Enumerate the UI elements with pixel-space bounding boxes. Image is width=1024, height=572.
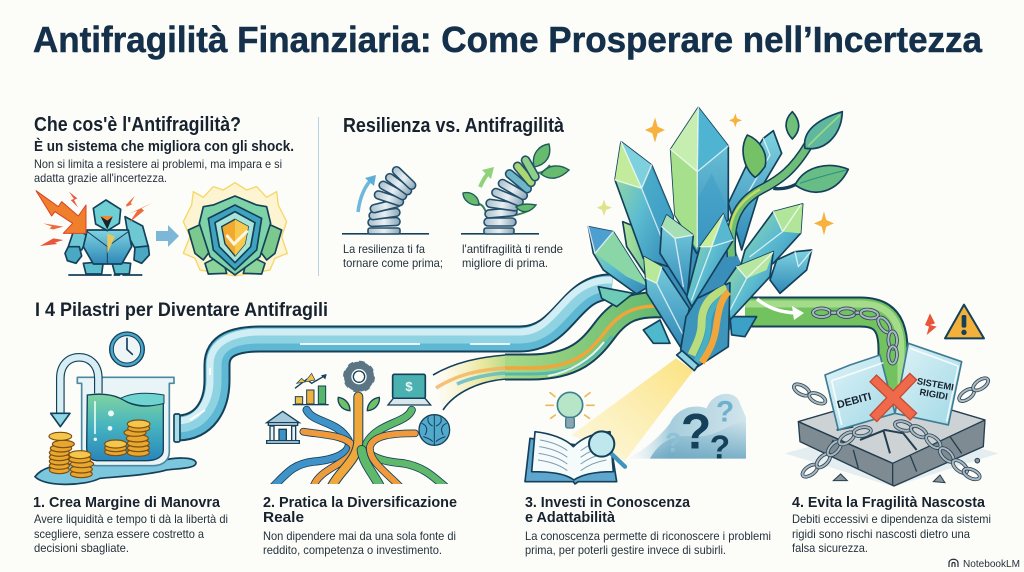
pillar 3 text: La conoscenza permette di riconoscere i problemi [525, 529, 771, 543]
cracked stone base [785, 393, 998, 487]
text block: antifragility: migliore di prima. [462, 256, 548, 270]
watermark: NotebookLM: NotebookLM [963, 558, 1020, 570]
heading: resilience vs antifragility: Resilienza vs. Antifragilità [343, 115, 565, 137]
pillar 3 heading: e Adattabilità [525, 509, 616, 526]
crystal: left short [588, 227, 648, 294]
flashlight beam [572, 358, 693, 461]
crystal: right upper [737, 204, 803, 280]
illustration: roots with income icons [267, 363, 450, 487]
pipe: multicolour knowledge stream [433, 305, 665, 410]
illustration: book, bulb and question fog [525, 358, 746, 484]
pillar 1 [33, 494, 228, 555]
question marks: ? [681, 403, 711, 459]
crystal: tall centre [671, 107, 728, 253]
vine with leaves [730, 112, 848, 257]
illustration: fragile blocks and chains [785, 305, 998, 487]
pillar 2 heading: 2. Pratica la Diversificazione [263, 494, 457, 511]
flashlight nozzle [677, 351, 698, 371]
pillar 2 text: Non dipendere mai da una sola fonte di [263, 529, 456, 543]
pillar 2 heading [263, 494, 457, 526]
pillar 4 text: Debiti eccessivi e dipendenza da sistemi [792, 512, 991, 526]
beaker [77, 377, 174, 466]
pillar 2 heading: Reale [263, 509, 304, 526]
icon: laptop with dollar: $ [405, 379, 413, 394]
crystal: lower fragments [598, 287, 757, 343]
question fog [628, 394, 746, 459]
icon: spring with leaves and green arrow [461, 144, 569, 235]
icon: blue transition arrow [156, 225, 179, 247]
pillar 4 text: rigidi sono rischi nascosti dietro una [792, 527, 970, 541]
icon: white flow arrow [757, 299, 804, 320]
question marks [665, 396, 734, 466]
pillar 4 heading: 4. Evita la Fragilità Nascosta [792, 494, 986, 511]
open book [525, 432, 617, 484]
coins in beaker [105, 420, 150, 456]
illustration: crystal cluster with vine [588, 107, 848, 371]
pillar 1 heading: 1. Crea Margine di Manovra [33, 494, 221, 511]
pillar 2 text: reddito, competenza o investimento. [263, 543, 442, 557]
pillar 4 text [792, 512, 991, 555]
chain along green pipe [813, 308, 897, 364]
pillar 1 text: Avere liquidità e tempo ti dà la libertà di [34, 512, 228, 526]
panel: what is antifragility [34, 114, 294, 276]
crystal: mid centre [687, 214, 733, 307]
block: debiti: DEBITI [836, 391, 873, 411]
light bulb [546, 392, 594, 428]
chains on stone [800, 420, 981, 482]
question marks: ? [665, 428, 681, 458]
pillar 3 text [525, 529, 771, 557]
text block: antifragility: l'antifragilità ti rende [462, 242, 563, 256]
pillar 4 text: falsa sicurezza. [792, 541, 868, 555]
icon: laptop with dollar [388, 374, 431, 405]
pillar 3 heading [525, 494, 691, 526]
text block: antifragility [462, 242, 563, 270]
coin stacks outside [49, 432, 94, 478]
question marks: ? [710, 429, 730, 466]
puddle [35, 458, 196, 484]
text block: definition [34, 157, 282, 185]
icon: red spark [925, 313, 937, 335]
text block: resilience [343, 242, 443, 270]
icon: red cross [877, 380, 910, 415]
icon: brain [419, 415, 450, 445]
icon: shield golem with glow [183, 183, 287, 276]
icon: gear [345, 363, 373, 391]
icon: gold sparkles [597, 113, 834, 235]
illustration: beaker with coins and clock [35, 332, 196, 484]
text block: resilience: La resilienza ti fa [343, 242, 425, 256]
pillar 1 text [34, 512, 228, 555]
pillar 3 [525, 494, 771, 557]
block: debiti [825, 355, 895, 430]
upper background chains [792, 376, 990, 406]
pipe: green output pipe [745, 299, 901, 392]
crystal: left small back [623, 222, 660, 277]
crystal: base fill [640, 230, 747, 347]
text block: definition: Non si limita a resistere ai problemi, ma impara e si [34, 157, 282, 171]
clock [110, 332, 144, 367]
crystal: lower left [644, 257, 689, 347]
pillar 2 text [263, 529, 456, 557]
block: sistemi rigidi [895, 343, 962, 425]
text block: resilience: tornare come prima; [343, 256, 443, 270]
icon: armored robot hit by lightning [36, 191, 153, 275]
rubble [833, 458, 980, 483]
crystal: back right [728, 131, 782, 250]
subheading: improves with shocks: È un sistema che migliora con gli shock. [34, 138, 294, 155]
panel: resilience vs antifragility [342, 115, 569, 270]
icon: spring with blue arrow [342, 165, 429, 235]
block: sistemi rigidi: RIGIDI [919, 387, 949, 402]
text block: definition: adatta grazie all'incertezza. [34, 171, 167, 185]
siphon tube with arrow [51, 357, 98, 427]
pillar 1 text: scegliere, senza essere costretto a [34, 527, 204, 541]
divider [318, 117, 319, 276]
crystal: mid left [660, 215, 693, 297]
hose through crystal [681, 283, 730, 367]
heading: what is antifragility: Che cos'è l'Antifragilità? [34, 114, 241, 136]
pillar 3 heading: 3. Investi in Conoscenza [525, 494, 691, 511]
icon: bank building [267, 411, 299, 443]
pillar 3 text: prima, per poterli gestire invece di subirli. [525, 543, 726, 557]
crystal: right lower [725, 252, 773, 320]
pillar 2 [263, 494, 457, 557]
crystal: right small [770, 250, 812, 293]
title: Antifragilità Finanziaria: Come Prosperare nell’Incertezza [33, 19, 983, 60]
pillar 1 text: decisioni sbagliate. [34, 541, 129, 555]
heading: four pillars: I 4 Pilastri per Diventare Antifragili [35, 300, 328, 321]
icon: growth bar chart [293, 373, 329, 405]
block: sistemi rigidi: SISTEMI [916, 376, 955, 393]
icon: warning triangle [945, 305, 984, 338]
root network [273, 397, 445, 487]
leaves [338, 397, 379, 411]
question marks: ? [716, 396, 734, 429]
pipe connector [174, 414, 180, 442]
pipe: blue water pipe [177, 280, 612, 428]
pillar 4 [792, 494, 991, 555]
magnifying glass [589, 431, 625, 467]
crystal: tall left [615, 142, 673, 267]
